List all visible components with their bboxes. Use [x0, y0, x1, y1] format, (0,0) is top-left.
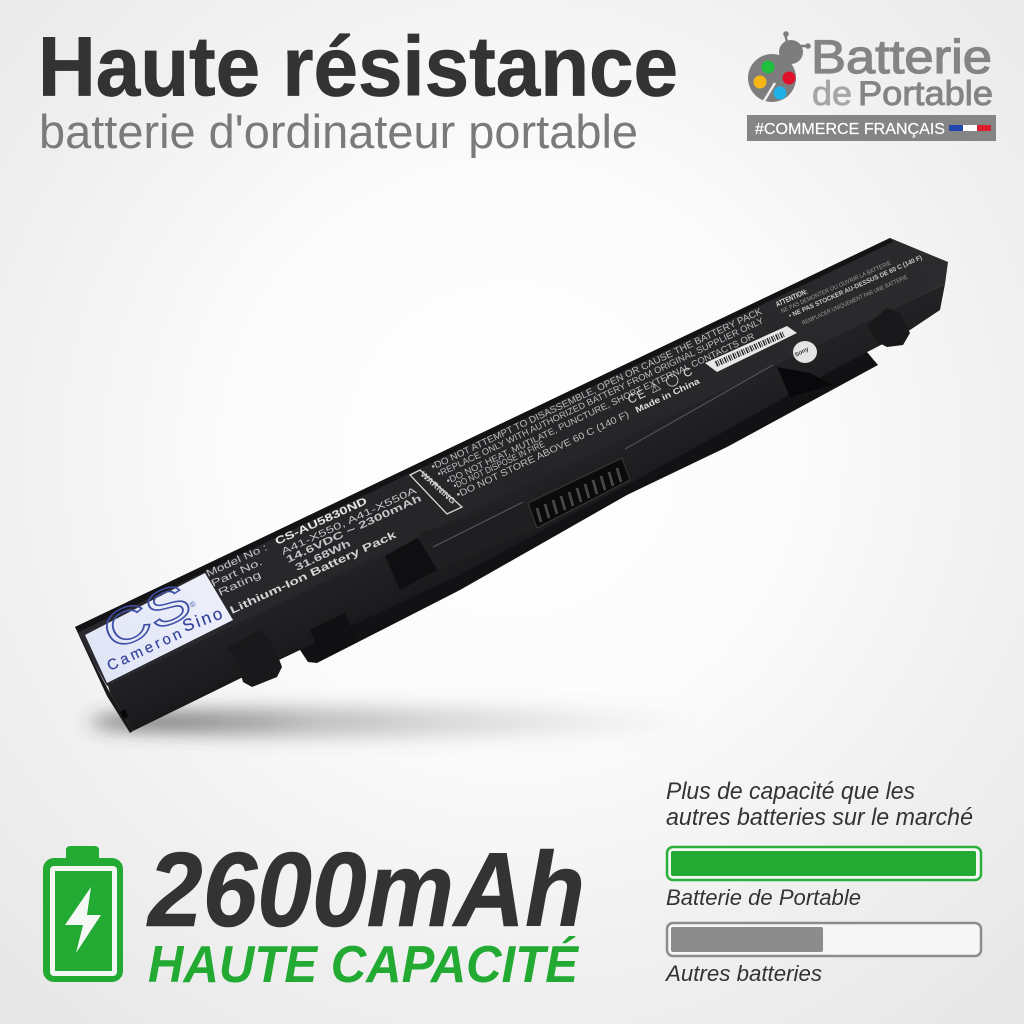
round sticker: Sony [794, 346, 810, 359]
battery top face [75, 238, 948, 686]
warning text: •DO NOT HEAT, MUTILATE, PUNCTURE, SHORT EXTERNAL CONTACTS OR [445, 331, 756, 486]
brand sticker [85, 572, 233, 683]
warning text: CE ⚠ ◯ C [625, 364, 695, 407]
label: Batterie de Portable: Batterie de Portable [666, 885, 861, 910]
comparison intro text: Plus de capacité que les [666, 778, 915, 805]
left end notch [120, 709, 128, 719]
bar: Autres batteries [667, 923, 981, 956]
brand sticker: CS [94, 572, 199, 661]
logo wordmark: Portable [858, 75, 993, 113]
brand sticker: Sino [180, 604, 225, 636]
specification text: CS-AU5830ND [273, 495, 370, 548]
warning text: • NE PAS STOCKER AU-DESSUS DE 60 C (140 F) [788, 254, 923, 320]
battery bottom tab [296, 345, 878, 663]
battery photo [75, 238, 948, 733]
comparison intro text: autres batteries sur le marché [666, 804, 973, 831]
icon: ladybug palette [748, 31, 811, 102]
logo: Batterie de Portable [747, 30, 996, 141]
warning text: Made in China [634, 376, 701, 415]
logo wordmark [811, 30, 993, 113]
round sticker [793, 341, 817, 363]
warning text: •DO NOT DISPOSE IN FIRE [452, 439, 546, 491]
logo wordmark: de [812, 75, 852, 113]
recess notches [385, 538, 437, 590]
warning text: REMPLACER UNIQUEMENT PAR UNE BATTERIE [801, 275, 909, 327]
capacity figure: 2600mAh [146, 831, 585, 949]
specification text: A41-X550, A41-X550A [280, 485, 419, 558]
battery top edge [75, 238, 893, 632]
specification text: 14.6VDC ~ 2300mAh [285, 493, 423, 566]
connector [528, 458, 630, 528]
title: Haute résistance [38, 20, 678, 114]
warning text: ATTENTION: [774, 287, 809, 309]
right clip nub [867, 308, 910, 347]
logo wordmark: Batterie [811, 30, 992, 83]
specification text: Lithium-Ion Battery Pack [228, 529, 398, 617]
left clip nub [227, 630, 282, 687]
warning text: •DO NOT STORE ABOVE 60 C (140 F) [455, 409, 631, 501]
warning text: •REPLACE ONLY WITH AUTHORIZED BATTERY FROM ORIGINAL SUPPLIER ONLY [436, 315, 765, 479]
warning box [410, 470, 462, 514]
specification text: 31.68Wh [294, 538, 353, 574]
barcode label [705, 326, 797, 372]
icon: green battery [43, 846, 123, 982]
highlight lines [433, 365, 773, 547]
capacity caption: HAUTE CAPACITÉ [148, 936, 579, 994]
left block [420, 502, 537, 570]
brand sticker: ® [188, 599, 197, 610]
comparison intro text [666, 778, 973, 831]
warning text [430, 254, 923, 501]
specification text [205, 485, 423, 617]
specification text: Model No : [205, 542, 269, 580]
warning text: NE PAS DEMONTER OU OUVRIR LA BATTERIE [780, 261, 892, 315]
subtitle: batterie d'ordinateur portable [39, 105, 638, 158]
bar: Batterie de Portable [667, 847, 981, 880]
warning text: •DO NOT ATTEMPT TO DISASSEMBLE, OPEN OR CAUSE THE BATTERY PACK [430, 306, 765, 473]
battery lower face [107, 284, 945, 731]
battery shadow [90, 707, 690, 737]
brand sticker: Cameron [105, 625, 184, 675]
label: Autres batteries: Autres batteries [664, 961, 822, 986]
logo banner: #COMMERCE FRANÇAIS [755, 121, 945, 138]
specification text: Part No. [210, 557, 264, 590]
logo banner [747, 115, 996, 141]
battery left end [75, 627, 133, 733]
specification text: Rating [217, 570, 263, 599]
warning box: WARNING [419, 470, 457, 506]
